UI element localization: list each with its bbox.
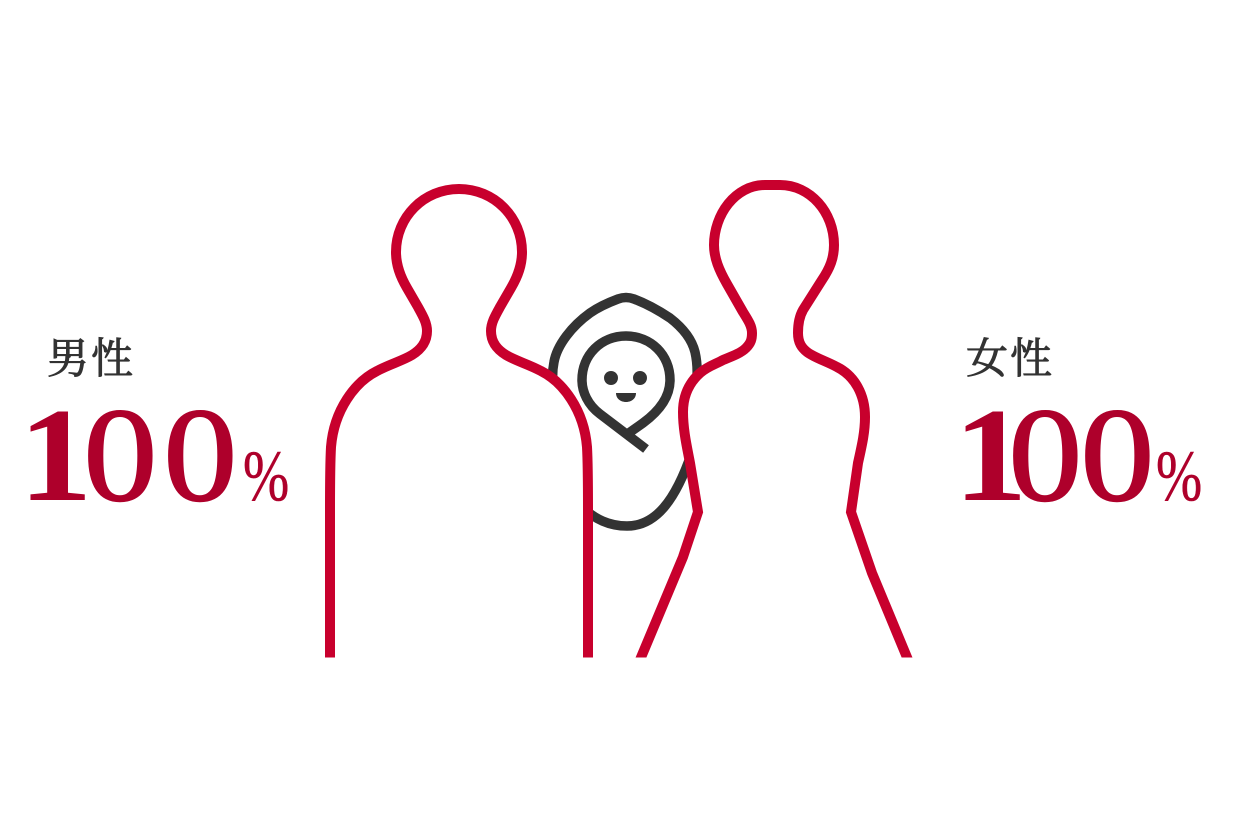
value: male 100: 00 — [83, 381, 237, 529]
baby mouth — [616, 393, 636, 402]
icon: woman silhouette — [637, 185, 911, 667]
percent sign: female: % — [1156, 436, 1202, 516]
infographic canvas — [30, 180, 1200, 658]
baby head outline — [582, 336, 670, 449]
heading: female: 女性 — [966, 337, 1054, 383]
label: female — [954, 337, 1202, 529]
heading: male: 男性 — [47, 337, 135, 383]
percent sign: male: % — [243, 436, 289, 516]
label: male — [19, 337, 289, 529]
value: male 100: 1 — [19, 381, 92, 529]
value: female 100: 00 — [1008, 381, 1154, 529]
baby eyes — [604, 371, 647, 385]
value: female 100: 1 — [954, 381, 1027, 529]
baby wrap outline — [553, 298, 697, 526]
icon: swaddled baby — [553, 298, 697, 526]
icon: man silhouette — [330, 189, 588, 667]
